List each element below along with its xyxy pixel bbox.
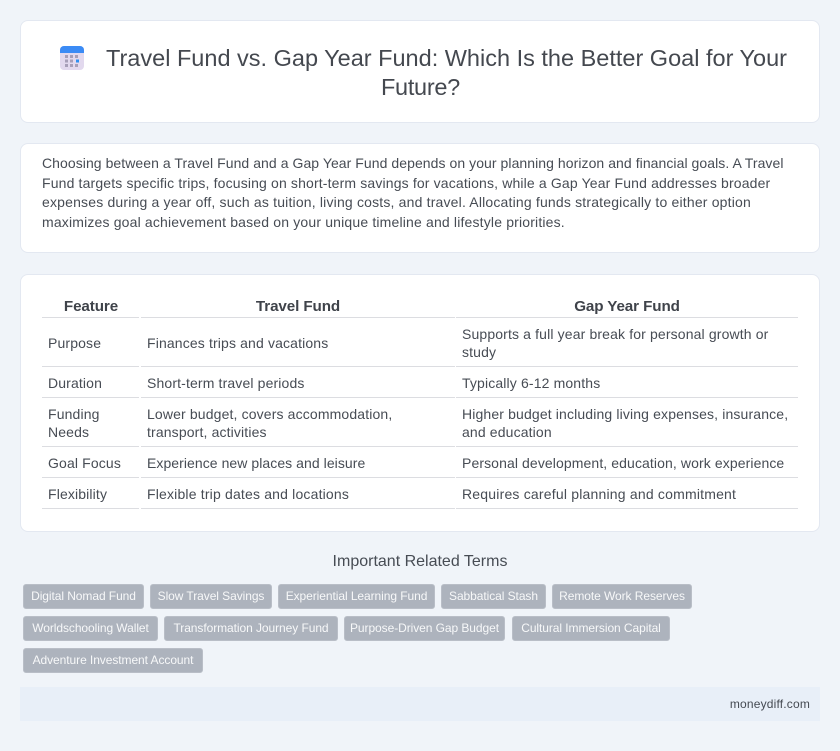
intro text <box>42 155 784 230</box>
row: purpose: Supports a full year break for personal growth or <box>462 326 768 342</box>
column headings: Feature <box>64 298 118 315</box>
row: goal focus: Goal Focus <box>48 455 121 471</box>
intro text: Fund targets specific trips, focusing on short-term savings for vacations, while a Gap Year Fund addresses broader <box>42 174 770 190</box>
title <box>106 45 787 100</box>
intro text: expenses during a year off, such as tuition, living costs, and travel. Allocating funds strategically to either option <box>42 194 751 210</box>
row: funding needs: Funding <box>48 406 100 422</box>
related term tags: Slow Travel Savings <box>158 589 264 603</box>
footer source: moneydiff.com <box>730 697 810 711</box>
related term tags: Experiential Learning Fund <box>286 589 427 603</box>
related term tags <box>23 584 692 673</box>
row: goal focus: Experience new places and leisure <box>147 455 365 471</box>
row: funding needs: Needs <box>48 424 89 440</box>
related term tags: Digital Nomad Fund <box>31 589 136 603</box>
row: goal focus <box>48 455 784 471</box>
intro text: Choosing between a Travel Fund and a Gap Year Fund depends on your planning horizon and financial goals. A Travel <box>42 155 784 171</box>
icon: calendar <box>60 46 84 70</box>
related term tags: Remote Work Reserves <box>559 589 685 603</box>
related term tags: Transformation Journey Fund <box>173 621 329 635</box>
row: duration: Duration <box>48 375 102 391</box>
column headings: Travel Fund <box>256 298 340 315</box>
row: flexibility: Requires careful planning and commitment <box>462 486 736 502</box>
intro card <box>20 143 820 253</box>
title: Future? <box>381 74 460 100</box>
row: funding needs: Higher budget including living expenses, insurance, <box>462 406 788 422</box>
row: purpose: Finances trips and vacations <box>147 335 328 351</box>
row: duration <box>48 375 600 391</box>
row: flexibility <box>48 486 736 502</box>
row: flexibility: Flexible trip dates and locations <box>147 486 349 502</box>
title: Travel Fund vs. Gap Year Fund: Which Is the Better Goal for Your <box>106 45 787 71</box>
related term tags: Worldschooling Wallet <box>32 621 149 635</box>
related term tags: Cultural Immersion Capital <box>521 621 661 635</box>
comparison table <box>42 298 798 509</box>
row: purpose <box>48 326 768 360</box>
related terms heading: Important Related Terms <box>333 553 507 570</box>
related term tags: Purpose-Driven Gap Budget <box>350 621 499 635</box>
footer bar <box>20 687 820 721</box>
row: funding needs: transport, activities <box>147 424 267 440</box>
header card <box>20 20 820 123</box>
row: goal focus: Personal development, education, work experience <box>462 455 784 471</box>
row: duration: Short-term travel periods <box>147 375 305 391</box>
related term tags: Sabbatical Stash <box>449 589 538 603</box>
column headings <box>64 298 680 315</box>
column headings: Gap Year Fund <box>574 298 680 315</box>
row: funding needs: and education <box>462 424 552 440</box>
row: flexibility: Flexibility <box>48 486 107 502</box>
row: funding needs <box>48 406 788 440</box>
row: duration: Typically 6-12 months <box>462 375 600 391</box>
related term tags: Adventure Investment Account <box>33 653 193 667</box>
row: funding needs: Lower budget, covers accommodation, <box>147 406 392 422</box>
intro text: maximizes goal achievement based on your unique timeline and lifestyle priorities. <box>42 214 565 230</box>
row: purpose: Purpose <box>48 335 101 351</box>
table card <box>20 274 820 532</box>
row: purpose: study <box>462 344 496 360</box>
